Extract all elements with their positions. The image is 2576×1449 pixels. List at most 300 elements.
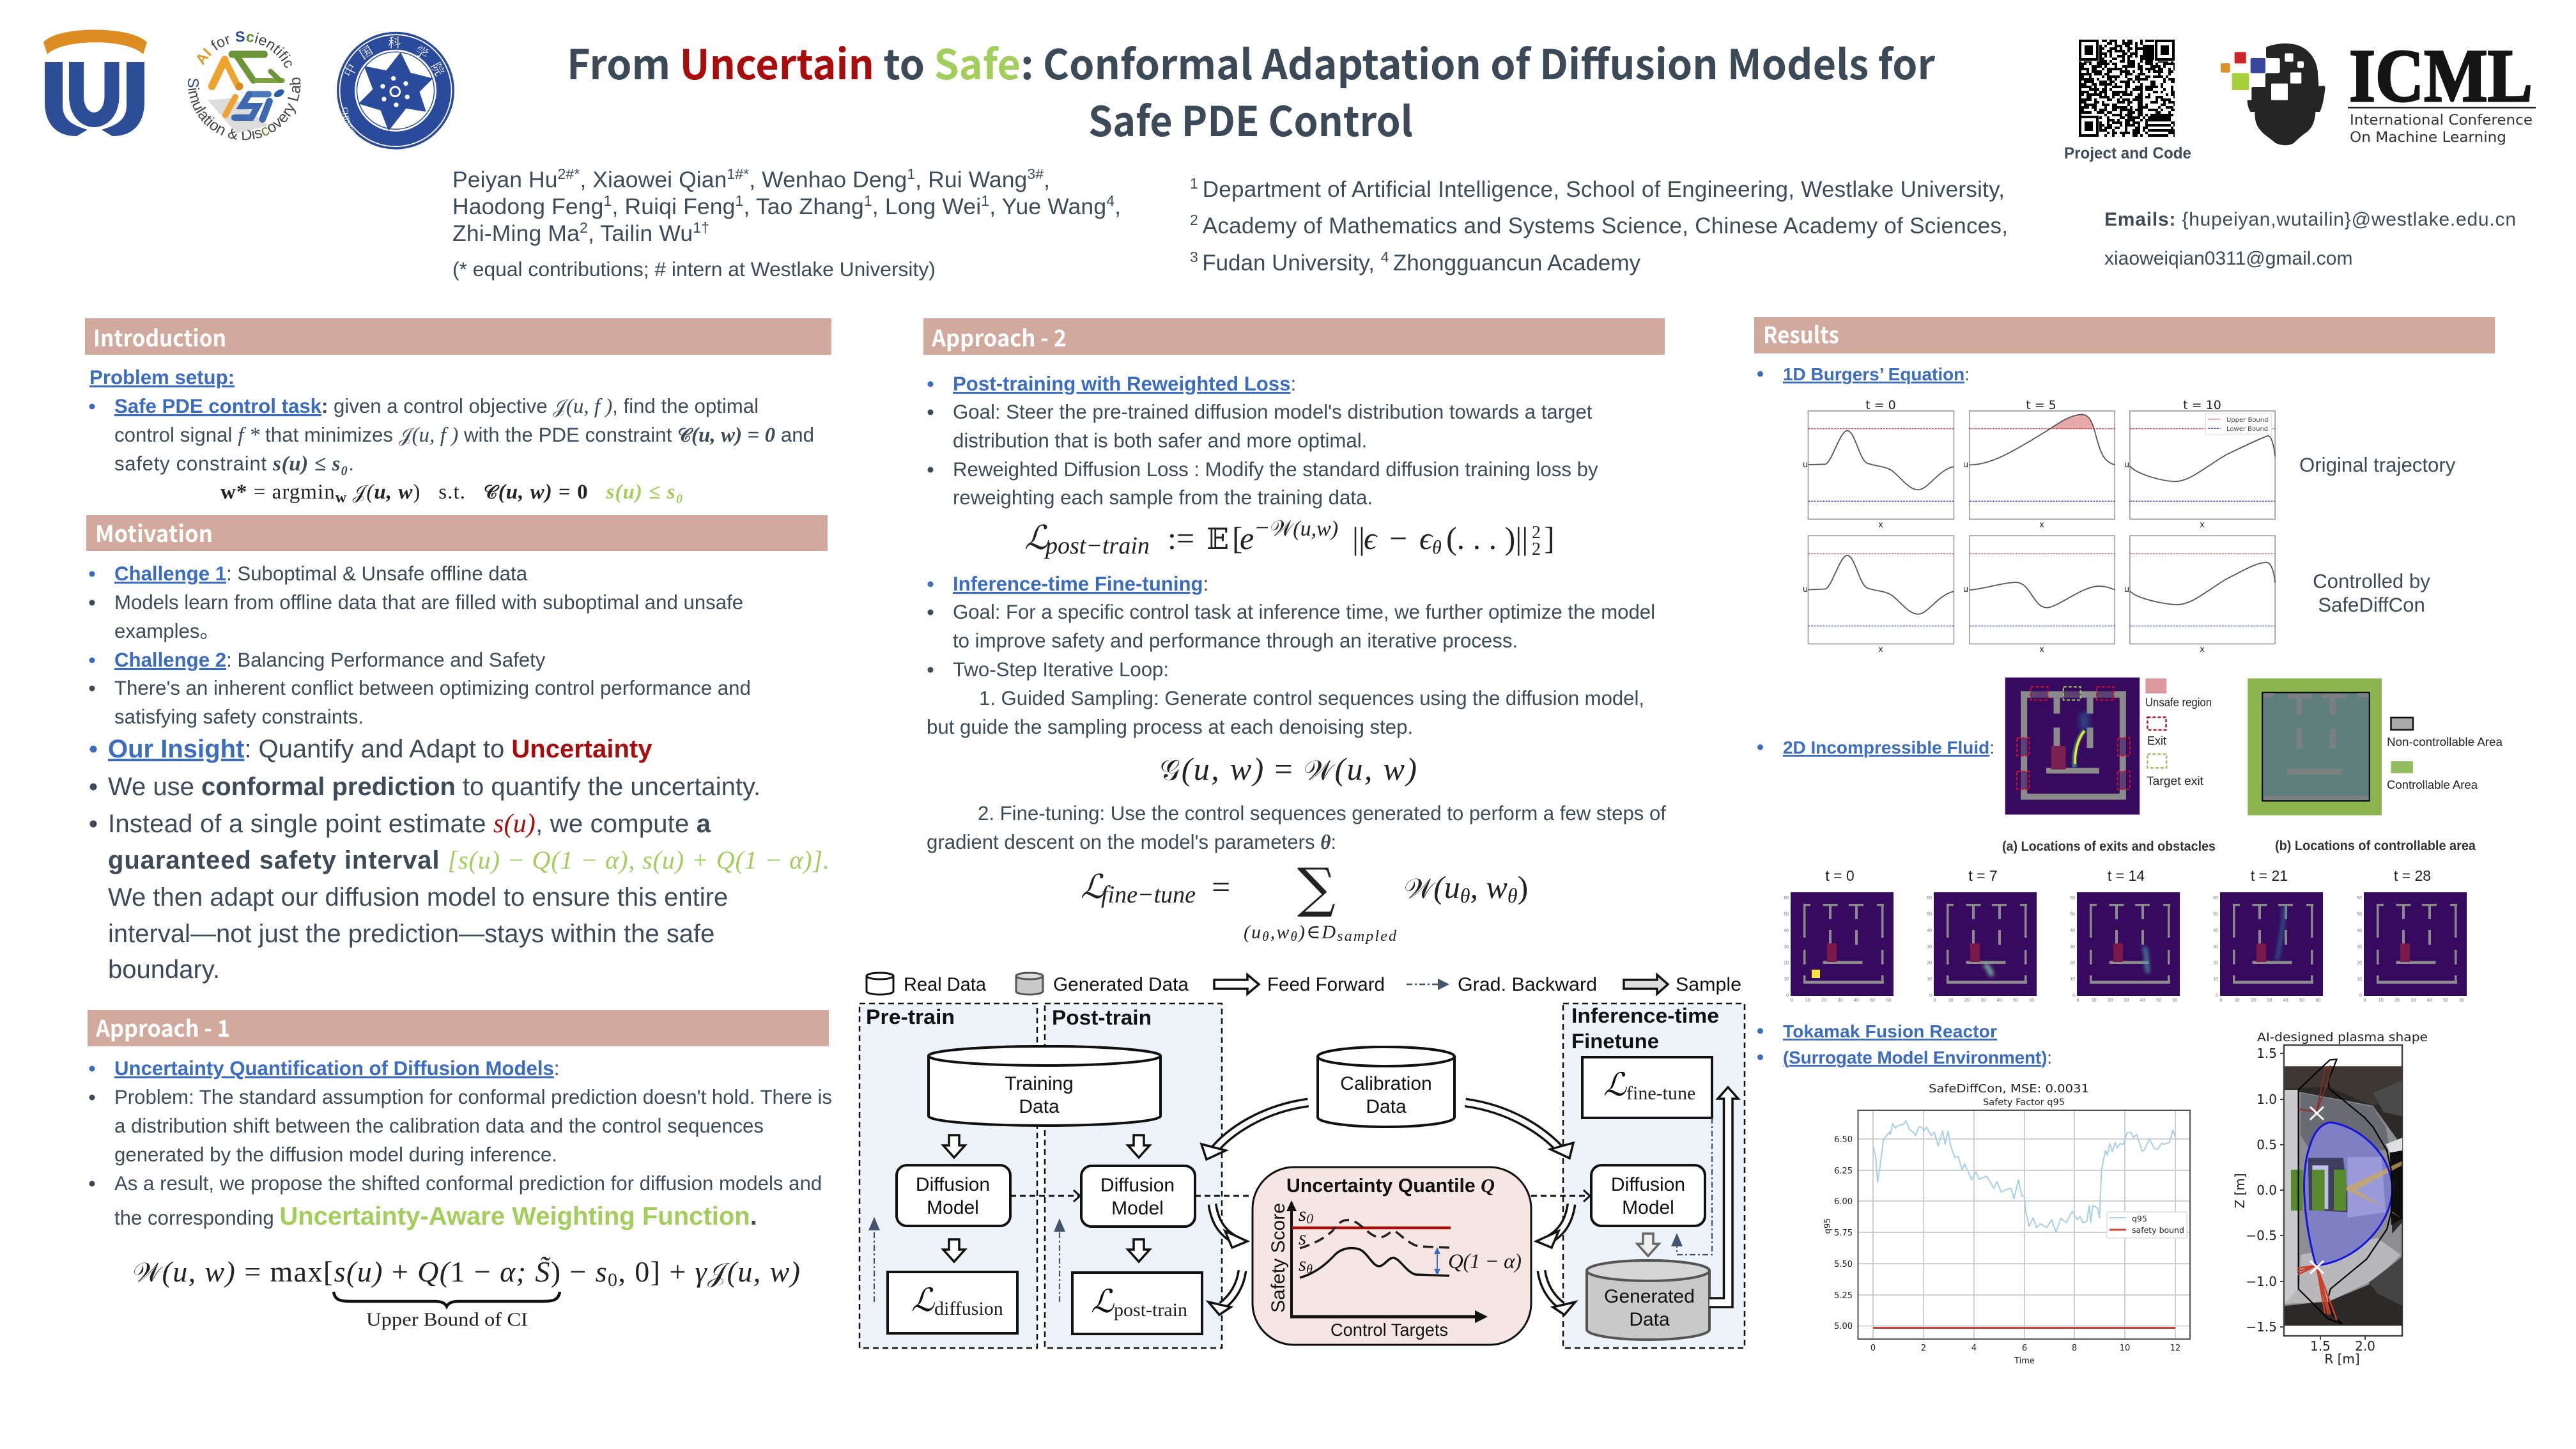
chart: fluid time series: t = 7 bbox=[1968, 867, 1998, 884]
logo: AI for Scientific Simulation and Discovery Lab bbox=[188, 31, 300, 141]
data store: training data: Training bbox=[1005, 1073, 1074, 1094]
chart: AI-designed plasma shape bbox=[2232, 1030, 2428, 1367]
formula: fine-tune loss: ℒ bbox=[1081, 869, 1106, 906]
panel: uncertainty quantile: θ bbox=[1306, 1262, 1313, 1276]
chart: Burgers trajectories: Upper Bound bbox=[2226, 417, 2268, 424]
subheading: tokamak: (Surrogate Model Environment): bbox=[1783, 1048, 2052, 1067]
formula: fine-tune loss: θ bbox=[1508, 884, 1518, 907]
formula: fine-tune loss: sampled bbox=[1337, 928, 1397, 945]
stage: pre-train: Pre-train bbox=[866, 1005, 955, 1028]
text: post-training: Post-training with Reweighted Loss: bbox=[953, 373, 1296, 395]
authors: , Wenhao Deng bbox=[749, 167, 907, 192]
panel: uncertainty quantile bbox=[1253, 1167, 1531, 1345]
chart: AI-designed plasma shape: 0.5 bbox=[2256, 1137, 2277, 1152]
node: fine-tune loss: fine-tune bbox=[1626, 1083, 1695, 1104]
authors: 1 bbox=[864, 192, 872, 209]
formula: post-train loss: 2 bbox=[1532, 523, 1541, 543]
heading: motivation: Motivation bbox=[95, 516, 213, 549]
label: controlled by SafeDiffCon bbox=[2313, 570, 2430, 616]
authors: 2 bbox=[580, 219, 588, 236]
data store: generated data: Generated bbox=[1604, 1286, 1695, 1307]
text: problem setup: safety constraint s(u) ≤ s₀. bbox=[114, 453, 354, 476]
node: diffusion model pre-train: Diffusion bbox=[916, 1174, 990, 1195]
text: inference-time fine-tuning: 1. Guided Sampling: Generate control sequences using the diffusion model, bbox=[979, 687, 1644, 709]
subheading: tokamak: Tokamak Fusion Reactor bbox=[1783, 1021, 1997, 1041]
chart: AI-designed plasma shape: Z [m] bbox=[2232, 1173, 2248, 1209]
logo: Chinese Academy of Sciences seal: 院 bbox=[428, 59, 450, 79]
subheading: 1D Burgers: 1D Burgers’ Equation: bbox=[1783, 364, 1970, 384]
chart: safety factor q95: safety bound bbox=[2132, 1225, 2184, 1235]
affiliations: 3 bbox=[1190, 249, 1202, 265]
formula: constrained optimisation: 𝒥 bbox=[347, 482, 369, 503]
chart: safety factor q95: 6.50 bbox=[1834, 1135, 1853, 1145]
chart: AI-designed plasma shape: 2.0 bbox=[2355, 1338, 2375, 1354]
affiliations: 2 bbox=[1190, 212, 1202, 228]
text: problem setup: Problem setup: bbox=[89, 366, 235, 389]
arrowheads: gradient backward bbox=[868, 1217, 1683, 1246]
title bbox=[567, 33, 1935, 148]
formula: post-train loss: ℒ bbox=[1024, 520, 1049, 557]
data store: generated data: Data bbox=[1629, 1309, 1670, 1330]
formula: fine-tune loss bbox=[1081, 856, 1528, 945]
figure: locations of exits and obstacles bbox=[2002, 678, 2216, 854]
node: fine-tune loss bbox=[1582, 1057, 1712, 1118]
figure: locations of exits and obstacles: Target exit bbox=[2147, 775, 2203, 787]
chart: safety factor q95: 8 bbox=[2072, 1344, 2077, 1353]
stage: inference-time finetune: Finetune bbox=[1571, 1030, 1659, 1053]
logo: ICML wordmark bbox=[2348, 34, 2536, 146]
stage: inference-time finetune bbox=[1563, 1003, 1745, 1348]
formula: fine-tune loss: θ bbox=[1460, 884, 1470, 907]
stage: post-train: Post-train bbox=[1052, 1006, 1152, 1029]
text: inference-time fine-tuning: Two-Step Iterative Loop: bbox=[953, 658, 1169, 681]
node: diffusion model pre-train bbox=[897, 1165, 1010, 1226]
text: fine-tuning step: gradient descent on the model's parameters θ: bbox=[927, 831, 1336, 853]
authors: 1 bbox=[907, 166, 915, 182]
node: diffusion model pre-train: Model bbox=[927, 1197, 979, 1218]
chart: AI-designed plasma shape: AI-designed plasma shape bbox=[2257, 1030, 2428, 1044]
formula: uncertainty-aware weighting: 0 bbox=[608, 1269, 617, 1290]
chart: safety factor q95: 0 bbox=[1870, 1344, 1876, 1353]
chart: Burgers trajectories: x bbox=[1878, 520, 1883, 530]
formula: fine-tune loss: (u bbox=[1244, 922, 1261, 943]
panel: introduction bbox=[85, 318, 831, 506]
formula: uncertainty-aware weighting bbox=[133, 1255, 800, 1330]
panel: uncertainty quantile: Control Targets bbox=[1330, 1320, 1448, 1340]
chart: safety factor q95: SafeDiffCon, MSE: 0.0031 bbox=[1929, 1082, 2089, 1096]
arrow: sample to generated data bbox=[1637, 1234, 1659, 1256]
formula: uncertainty-aware weighting: Upper Bound of CI bbox=[366, 1309, 528, 1330]
arrows: feed-forward dashed links bbox=[1010, 1195, 1589, 1197]
heading: motivation bbox=[86, 515, 828, 551]
stage: pre-train bbox=[860, 1003, 1037, 1348]
text: uncertainty quantification: a distribution shift between the calibration data and the control sequences bbox=[114, 1115, 764, 1137]
chart: AI-designed plasma shape: 1.5 bbox=[2310, 1338, 2331, 1354]
chart: AI-designed plasma shape: −0.5 bbox=[2246, 1228, 2277, 1243]
arrow: finetune model to quantile bbox=[1536, 1204, 1571, 1248]
figure: locations of exits and obstacles: (a) Locations of exits and obstacles bbox=[2002, 839, 2216, 854]
figure: locations of exits and obstacles: Unsafe region bbox=[2145, 696, 2212, 709]
chart: fluid time series: t = 0 bbox=[1825, 867, 1855, 884]
logo: AI for Scientific Simulation and Discovery Lab: AI for Scientific bbox=[197, 31, 292, 68]
arrow: quantile to generated data bbox=[1541, 1271, 1575, 1315]
data store: generated data bbox=[1587, 1260, 1709, 1340]
chart: safety factor q95: 5.25 bbox=[1834, 1291, 1853, 1301]
formula: post-train loss: 2 bbox=[1532, 539, 1541, 559]
authors: (* equal contributions; # intern at Westlake University) bbox=[452, 258, 936, 281]
authors: 4 bbox=[1106, 192, 1114, 209]
chart: Burgers trajectories bbox=[1803, 398, 2275, 655]
formula: fine-tune loss: fine−tune bbox=[1101, 881, 1196, 908]
logo: Chinese Academy of Sciences seal: 中 bbox=[338, 60, 360, 80]
logo: Westlake university emblem bbox=[43, 29, 147, 136]
chart: Burgers trajectories: u bbox=[2124, 585, 2129, 594]
arrowheads: dashed links bbox=[1074, 1190, 1590, 1202]
formula: post-train loss: ] bbox=[1544, 520, 1555, 556]
formula: uncertainty-aware weighting: 𝒲(u, w) = max[s(u) + Q(1 − α; S̃) − s bbox=[133, 1255, 607, 1288]
authors: 3# bbox=[1027, 166, 1044, 182]
formula: fine-tune loss: θ bbox=[1290, 929, 1297, 944]
formula: fine-tune loss: = bbox=[1212, 869, 1230, 906]
text: our insight: Our Insight: Quantify and Adapt to Uncertainty bbox=[108, 735, 652, 763]
heading: approach 2: Approach - 2 bbox=[931, 320, 1067, 353]
data store: calibration data: Data bbox=[1366, 1096, 1407, 1117]
node: post-train loss: post-train bbox=[1114, 1299, 1187, 1321]
chart: safety factor q95: 10 bbox=[2120, 1344, 2130, 1353]
authors: 2#* bbox=[558, 166, 580, 182]
text: problem setup: control signal f * that minimizes 𝒥(u, f ) with the PDE constraint 𝒞(u, w) = 0 and bbox=[114, 424, 814, 447]
logo: ICML wordmark: International Conference bbox=[2350, 112, 2533, 128]
chart: Burgers trajectories: t = 5 bbox=[2026, 398, 2056, 412]
text: fine-tuning step: 2. Fine-tuning: Use the control sequences generated to perform a few steps of bbox=[978, 802, 1666, 825]
text: uncertainty quantification: the corresponding Uncertainty-Aware Weighting Function. bbox=[114, 1202, 757, 1230]
chart: safety factor q95: Time bbox=[2014, 1356, 2035, 1366]
chart: Burgers trajectories: t = 10 bbox=[2183, 398, 2221, 412]
text: uncertainty quantification bbox=[89, 1057, 832, 1230]
text: fine-tuning step bbox=[927, 802, 1666, 853]
formula: post-train loss: ϵ bbox=[1364, 520, 1378, 556]
authors: , Rui Wang bbox=[915, 167, 1027, 192]
chart: Burgers trajectories: Lower Bound bbox=[2226, 426, 2268, 433]
label: controlled by SafeDiffCon: SafeDiffCon bbox=[2318, 594, 2425, 616]
node: diffusion loss: diffusion bbox=[934, 1298, 1003, 1319]
logo: ICML wordmark: ICML bbox=[2349, 34, 2533, 118]
chart: Burgers trajectories: t = 0 bbox=[1865, 398, 1896, 412]
affiliations: Department of Artificial Intelligence, School of Engineering, Westlake University, bbox=[1203, 177, 2005, 202]
formula: uncertainty-aware weighting: γ𝒥(u, w) bbox=[695, 1255, 800, 1288]
chart: safety factor q95: q95 bbox=[2132, 1214, 2147, 1223]
heading: approach 1 bbox=[88, 1010, 829, 1046]
heading: results bbox=[1754, 317, 2495, 353]
panel: framework diagram bbox=[860, 973, 1745, 1348]
panel: uncertainty quantile: s bbox=[1299, 1227, 1306, 1249]
authors: , Ruiqi Feng bbox=[612, 194, 735, 219]
authors: 1 bbox=[604, 192, 612, 209]
chart: AI-designed plasma shape: 0.0 bbox=[2256, 1182, 2277, 1198]
chart: safety factor q95 bbox=[1823, 1082, 2190, 1366]
subheading: 2D fluid: 2D Incompressible Fluid: bbox=[1783, 738, 1994, 757]
text: post-training: reweighting each sample from the training data. bbox=[953, 486, 1373, 509]
chart: Burgers trajectories: x bbox=[2039, 645, 2044, 655]
legend: Real Data bbox=[904, 974, 986, 995]
legend: Generated Data bbox=[1053, 974, 1189, 995]
data store: calibration data bbox=[1318, 1047, 1454, 1127]
formula: fine-tune loss: )∈D bbox=[1297, 922, 1336, 943]
formula: post-train loss: 𝔼 bbox=[1207, 522, 1229, 556]
text: our insight: We use conformal prediction to quantify the uncertainty. bbox=[108, 773, 760, 801]
legend bbox=[867, 973, 1741, 995]
logo: ICML wordmark: On Machine Learning bbox=[2350, 130, 2506, 146]
arrow: generated data to fine-tune loss bbox=[1709, 1087, 1738, 1307]
text: uncertainty quantification: As a result, we propose the shifted conformal prediction for diffusion models and bbox=[114, 1172, 822, 1195]
chart: AI-designed plasma shape: −1.0 bbox=[2246, 1274, 2277, 1289]
chart: AI-designed plasma shape: −1.5 bbox=[2246, 1319, 2277, 1335]
chart: Burgers trajectories: u bbox=[1963, 585, 1968, 594]
authors: , Xiaowei Qian bbox=[580, 167, 727, 192]
contact emails bbox=[2104, 209, 2516, 269]
contact emails: Emails: {hupeiyan,wutailin}@westlake.edu.cn bbox=[2104, 209, 2516, 230]
formula: post-train loss: ϵ bbox=[1419, 520, 1433, 556]
node: diffusion model finetune bbox=[1591, 1165, 1705, 1226]
formula: constrained optimisation: w* = argmin bbox=[220, 481, 335, 504]
text: our insight: Instead of a single point estimate s(u), we compute a bbox=[108, 809, 711, 839]
data store: training data: Data bbox=[1019, 1096, 1060, 1117]
arrows: data to models bbox=[943, 1135, 1150, 1262]
text: inference-time fine-tuning bbox=[927, 573, 1655, 738]
formula: guidance: 𝒢(u, w) = 𝒲(u, w) bbox=[1160, 751, 1417, 787]
figure: locations of controllable area bbox=[2248, 678, 2503, 853]
chart: AI-designed plasma shape: 1.5 bbox=[2256, 1046, 2277, 1061]
authors: 1† bbox=[693, 219, 709, 236]
logo: Chinese Academy of Sciences seal: CHINESE ACADEMY OF SCIENCES bbox=[343, 107, 357, 134]
data store: calibration data: Calibration bbox=[1340, 1073, 1432, 1094]
authors: Zhi-Ming Ma bbox=[452, 221, 580, 246]
text: our insight: interval—not just the prediction—stays within the safe bbox=[108, 920, 714, 948]
text: challenges: Challenge 2: Balancing Performance and Safety bbox=[114, 649, 546, 671]
chart: Burgers trajectories: x bbox=[2200, 520, 2205, 530]
text: challenges: satisfying safety constraints. bbox=[114, 706, 364, 728]
logo: Chinese Academy of Sciences seal: 科 bbox=[388, 33, 401, 51]
node: diffusion model post-train: Model bbox=[1111, 1198, 1164, 1219]
chart: fluid time series: t = 28 bbox=[2394, 867, 2431, 884]
affiliations: 4 bbox=[1381, 249, 1393, 265]
figure: locations of exits and obstacles: Exit bbox=[2147, 734, 2166, 747]
panel: motivation bbox=[86, 515, 829, 984]
text: problem setup bbox=[89, 366, 814, 476]
affiliations: Zhongguancun Academy bbox=[1393, 251, 1641, 275]
text: inference-time fine-tuning: to improve safety and performance through an iterative process. bbox=[953, 630, 1518, 652]
formula: fine-tune loss: ∑ bbox=[1297, 856, 1336, 919]
node: diffusion model post-train: Diffusion bbox=[1100, 1175, 1175, 1196]
heading: introduction: Introduction bbox=[93, 320, 226, 353]
heading: introduction bbox=[85, 318, 831, 355]
panel: uncertainty quantile: s bbox=[1299, 1253, 1306, 1275]
data store: training data bbox=[929, 1046, 1161, 1126]
panel: approach 1 bbox=[88, 1010, 832, 1330]
node: fine-tune loss: ℒ bbox=[1603, 1067, 1626, 1103]
formula: post-train loss: post−train bbox=[1044, 532, 1150, 559]
formula: post-train loss: − bbox=[1389, 520, 1407, 556]
chart: AI-designed plasma shape: 1.0 bbox=[2256, 1092, 2277, 1107]
text: our insight: We then adapt our diffusion model to ensure this entire bbox=[108, 883, 728, 911]
authors bbox=[452, 166, 1121, 281]
authors: , Long Wei bbox=[872, 194, 981, 219]
affiliations bbox=[1190, 175, 2008, 275]
text: our insight: boundary. bbox=[108, 956, 220, 984]
authors: , bbox=[1044, 167, 1050, 192]
chart: safety factor q95: 6.25 bbox=[1834, 1166, 1853, 1176]
panel: approach 2 bbox=[923, 318, 1666, 945]
text: inference-time fine-tuning: but guide the sampling process at each denoising step. bbox=[927, 716, 1413, 738]
chart: safety factor q95: 5.75 bbox=[1834, 1228, 1853, 1238]
chart: safety factor q95: 2 bbox=[1921, 1344, 1926, 1353]
figure: locations of controllable area: Controllable Area bbox=[2387, 779, 2478, 791]
legend: Sample bbox=[1676, 974, 1741, 995]
title: Safe PDE Control bbox=[1088, 89, 1413, 148]
formula: constrained optimisation: (u, w) s.t. 𝒞(u, w) = 0 s(u) ≤ s₀ bbox=[366, 481, 683, 504]
subheading: tokamak bbox=[1757, 1021, 2052, 1067]
logo: AI for Scientific Simulation and Discovery Lab: Simulation & Discovery Lab bbox=[188, 78, 300, 141]
chart: fluid time series: t = 21 bbox=[2251, 867, 2288, 884]
text: challenges: Models learn from offline data that are filled with suboptimal and unsafe bbox=[114, 591, 743, 614]
heading: results: Results bbox=[1763, 317, 1839, 350]
node: diffusion model post-train bbox=[1081, 1166, 1195, 1227]
authors: 1 bbox=[981, 192, 989, 209]
text: challenges: examples。 bbox=[114, 620, 220, 642]
formula: post-train loss: [ bbox=[1232, 520, 1243, 556]
affiliations: Fudan University, bbox=[1202, 251, 1381, 275]
QR caption: Project and Code bbox=[2064, 144, 2191, 162]
chart: Burgers trajectories: u bbox=[1963, 460, 1968, 470]
arrow: quantile to post-train loss bbox=[1208, 1271, 1242, 1315]
node: diffusion model finetune: Diffusion bbox=[1611, 1174, 1685, 1195]
text: post-training bbox=[928, 373, 1598, 509]
panel: uncertainty quantile: 0 bbox=[1306, 1211, 1313, 1227]
formula: constrained optimisation: w bbox=[335, 490, 347, 506]
node: post-train loss bbox=[1072, 1273, 1202, 1334]
legend: Feed Forward bbox=[1267, 974, 1385, 995]
affiliations: 1 bbox=[1190, 175, 1202, 192]
formula: uncertainty-aware weighting: , 0] + bbox=[618, 1255, 694, 1288]
figure: locations of controllable area: (b) Locations of controllable area bbox=[2275, 839, 2476, 853]
formula: fine-tune loss: θ bbox=[1262, 929, 1269, 944]
panel: uncertainty quantile: Q(1 − α) bbox=[1448, 1250, 1522, 1273]
chart: safety factor q95: 6 bbox=[2022, 1344, 2027, 1353]
logo: ICML head icon bbox=[2221, 43, 2325, 145]
chart: safety factor q95: 6.00 bbox=[1834, 1197, 1853, 1207]
chart: Burgers trajectories: x bbox=[2200, 645, 2205, 655]
node: diffusion model finetune: Model bbox=[1622, 1197, 1674, 1218]
text: challenges bbox=[89, 562, 751, 728]
formula: fine-tune loss: (u bbox=[1433, 869, 1460, 905]
chart: AI-designed plasma shape: R [m] bbox=[2324, 1351, 2360, 1367]
arrow: calibration to post-train bbox=[1201, 1103, 1308, 1159]
chart: safety factor q95: Safety Factor q95 bbox=[1983, 1097, 2065, 1108]
formula: post-train loss: e bbox=[1240, 520, 1254, 556]
formula: post-train loss: (. . . )|| bbox=[1446, 520, 1528, 556]
arrows: gradient backward bbox=[874, 1118, 1712, 1302]
text: uncertainty quantification: Uncertainty Quantification of Diffusion Models: bbox=[114, 1057, 560, 1080]
node: post-train loss: ℒ bbox=[1091, 1283, 1114, 1319]
formula: post-train loss: − bbox=[1254, 515, 1270, 541]
chart: Burgers trajectories: u bbox=[1803, 585, 1808, 594]
authors: , Tailin Wu bbox=[588, 221, 693, 246]
panel: uncertainty quantile: Uncertainty Quantile Q bbox=[1286, 1174, 1495, 1197]
text: inference-time fine-tuning: Goal: For a specific control task at inference time, we further optimize the model bbox=[953, 601, 1655, 623]
QR code: project and code bbox=[2079, 40, 2175, 137]
legend: Grad. Backward bbox=[1458, 974, 1597, 995]
chart: safety factor q95: 4 bbox=[1971, 1344, 1977, 1353]
authors: , Tao Zhang bbox=[743, 194, 864, 219]
formula: fine-tune loss: , w bbox=[1470, 869, 1508, 905]
text: post-training: distribution that is both safer and more optimal. bbox=[953, 430, 1367, 452]
heading: approach 2 bbox=[923, 318, 1665, 355]
chart: Burgers trajectories: x bbox=[1878, 645, 1883, 655]
contact emails: xiaoweiqian0311@gmail.com bbox=[2104, 248, 2352, 269]
logo: Chinese Academy of Sciences seal: 国 bbox=[355, 40, 376, 63]
chart: safety factor q95: 5.50 bbox=[1834, 1260, 1853, 1269]
chart: Burgers trajectories: u bbox=[2124, 460, 2129, 470]
formula: post-train loss: 𝒲(u,w) bbox=[1270, 517, 1338, 541]
chart: Burgers trajectories: u bbox=[1803, 460, 1808, 470]
authors: , bbox=[1114, 194, 1121, 219]
node: diffusion loss: ℒ bbox=[911, 1282, 934, 1318]
text: problem setup: Safe PDE control task: given a control objective 𝒥(u, f ), find the optimal bbox=[114, 395, 759, 418]
authors: Peiyan Hu bbox=[452, 167, 557, 192]
text: our insight: guaranteed safety interval [s(u) − Q(1 − α), s(u) + Q(1 − α)]. bbox=[108, 846, 829, 874]
text: post-training: Reweighted Diffusion Loss : Modify the standard diffusion training loss by bbox=[953, 458, 1598, 481]
label: original trajectory: Original trajectory bbox=[2299, 454, 2456, 476]
authors: 1 bbox=[736, 192, 743, 209]
logo: Chinese Academy of Sciences seal bbox=[337, 32, 454, 150]
label: controlled by SafeDiffCon: Controlled by bbox=[2313, 570, 2430, 593]
logo: Chinese Academy of Sciences seal: 学 bbox=[412, 40, 433, 63]
text: uncertainty quantification: generated by the diffusion model during inference. bbox=[114, 1143, 557, 1166]
chart: fluid time series: t = 14 bbox=[2108, 867, 2145, 884]
stage: inference-time finetune: Inference-time bbox=[1571, 1004, 1719, 1027]
formula: post-train loss: := bbox=[1168, 520, 1194, 556]
formula: fine-tune loss: ) bbox=[1518, 869, 1528, 905]
chart: safety factor q95: 12 bbox=[2170, 1344, 2180, 1353]
formula: fine-tune loss: 𝒲 bbox=[1404, 873, 1436, 904]
text: our insight bbox=[89, 735, 829, 984]
chart: safety factor q95: 5.00 bbox=[1834, 1322, 1853, 1331]
panel: uncertainty quantile: Safety Score bbox=[1268, 1203, 1289, 1313]
affiliations: Academy of Mathematics and Systems Science, Chinese Academy of Sciences, bbox=[1203, 213, 2008, 238]
formula: post-train loss: || bbox=[1352, 520, 1365, 556]
node: diffusion loss bbox=[888, 1272, 1017, 1333]
text: post-training: Goal: Steer the pre-trained diffusion model's distribution towards a target bbox=[953, 401, 1593, 423]
figure: locations of controllable area: Non-controllable Area bbox=[2387, 736, 2503, 748]
heading: approach 1: Approach - 1 bbox=[95, 1011, 230, 1044]
authors: 1#* bbox=[727, 166, 749, 182]
text: challenges: Challenge 1: Suboptimal & Unsafe offline data bbox=[114, 562, 528, 585]
panel: results bbox=[1754, 317, 2503, 1367]
arrow: post-train model to quantile bbox=[1212, 1204, 1247, 1248]
formula: fine-tune loss: ,w bbox=[1270, 922, 1289, 943]
authors: Haodong Feng bbox=[452, 194, 603, 219]
chart: safety factor q95: q95 bbox=[1823, 1218, 1833, 1234]
authors: , Yue Wang bbox=[989, 194, 1106, 219]
text: uncertainty quantification: Problem: The standard assumption for conformal prediction doesn't hold. There is bbox=[114, 1086, 832, 1108]
arrow: calibration to finetune bbox=[1465, 1103, 1573, 1158]
title: From Uncertain to Safe: Conformal Adaptation of Diffusion Models for bbox=[567, 33, 1935, 91]
text: challenges: There's an inherent conflict between optimizing control performance and bbox=[114, 677, 751, 699]
text: inference-time fine-tuning: Inference-time Fine-tuning: bbox=[953, 573, 1208, 595]
chart: Burgers trajectories: x bbox=[2039, 520, 2044, 530]
panel: uncertainty quantile: s bbox=[1299, 1203, 1306, 1225]
formula: post-train loss: θ bbox=[1432, 537, 1442, 558]
